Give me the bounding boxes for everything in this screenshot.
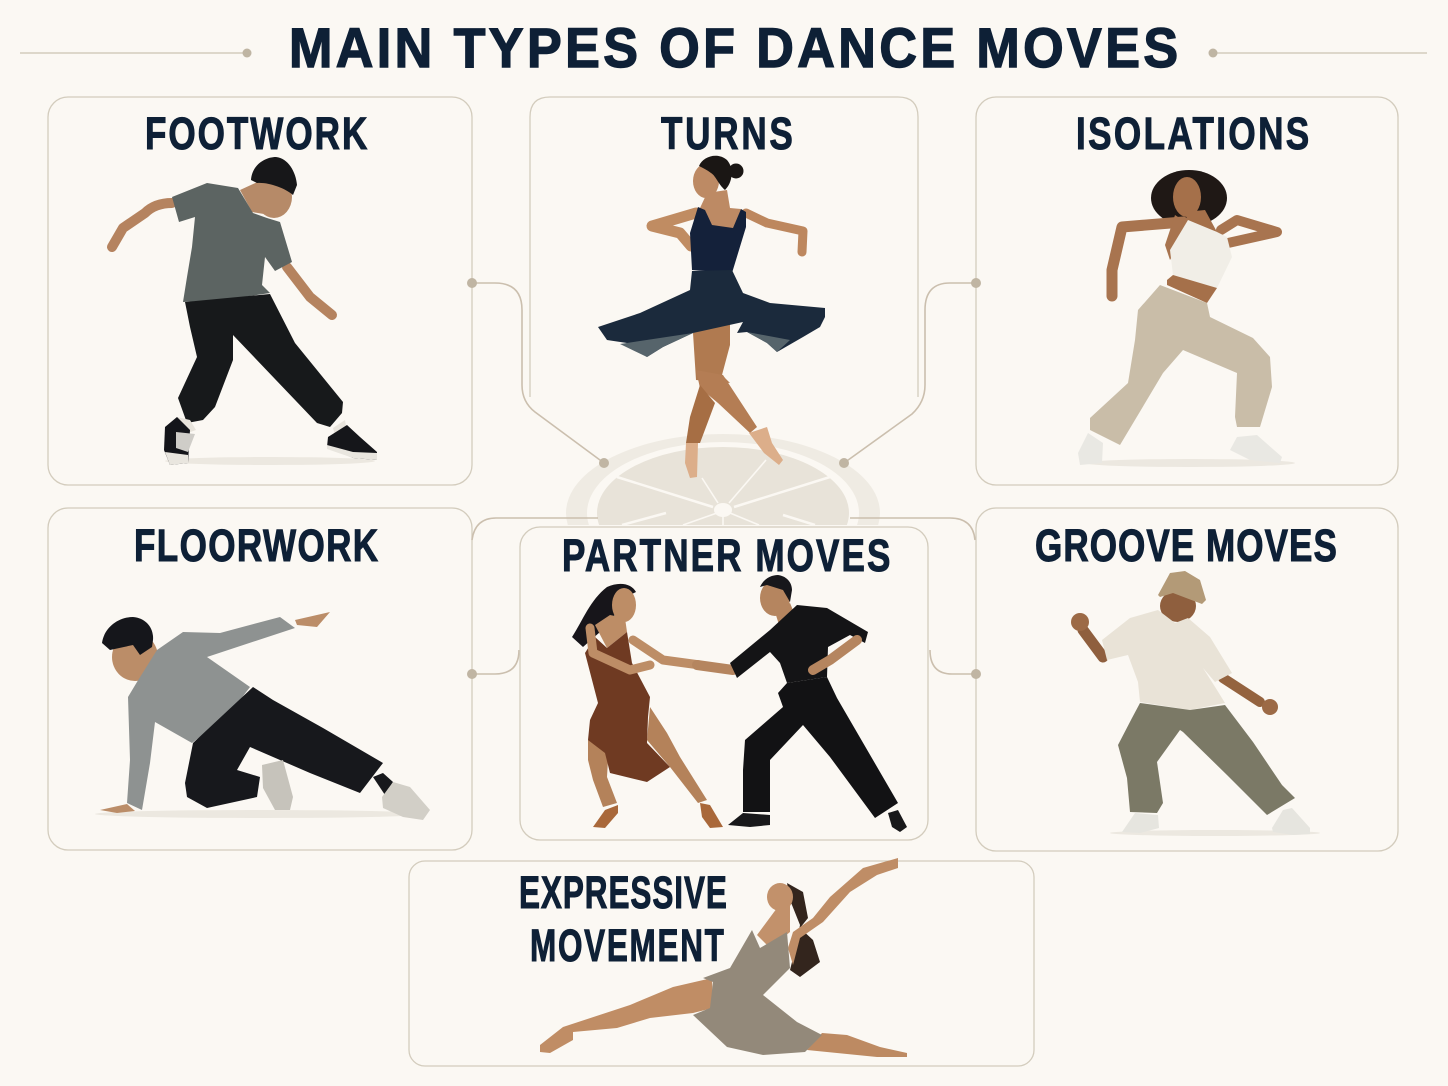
connector: groove to dial [850, 518, 981, 679]
heading: isolations: ISOLATIONS [1076, 108, 1309, 159]
title rule right [1208, 48, 1427, 58]
panel: groove moves [976, 508, 1398, 851]
heading: expressive movement [519, 869, 727, 971]
title rule left [20, 48, 252, 58]
panel: floorwork [48, 508, 472, 850]
figure: man dancer [697, 575, 907, 832]
connector: isolations to dial [839, 278, 981, 468]
heading: turns: TURNS [661, 108, 793, 159]
heading: groove moves: GROOVE MOVES [1035, 520, 1337, 571]
figure: woman dancer [572, 584, 723, 828]
connector: footwork to dial [467, 278, 609, 468]
panel: footwork [48, 97, 472, 485]
heading: expressive movement: EXPRESSIVE [519, 869, 727, 918]
figure: expressive dancer [540, 858, 907, 1057]
heading: floorwork: FLOORWORK [134, 520, 378, 571]
figure: ballerina [598, 156, 825, 478]
panel: partner moves [520, 527, 928, 840]
figure: floorwork dancer [95, 612, 430, 820]
connector: floorwork to dial [467, 518, 598, 679]
figure: isolations dancer [1078, 170, 1295, 467]
central floor dial [566, 434, 880, 525]
title: MAIN TYPES OF DANCE MOVES [289, 17, 1178, 79]
heading: partner moves: PARTNER MOVES [562, 530, 890, 581]
panel: expressive movement [409, 858, 1034, 1066]
heading: footwork: FOOTWORK [145, 108, 367, 159]
heading: expressive movement: MOVEMENT [530, 922, 724, 971]
panel: turns [530, 97, 918, 478]
panel: isolations [976, 97, 1398, 485]
figure: footwork dancer [112, 157, 377, 465]
figure: groove dancer [1071, 571, 1320, 836]
